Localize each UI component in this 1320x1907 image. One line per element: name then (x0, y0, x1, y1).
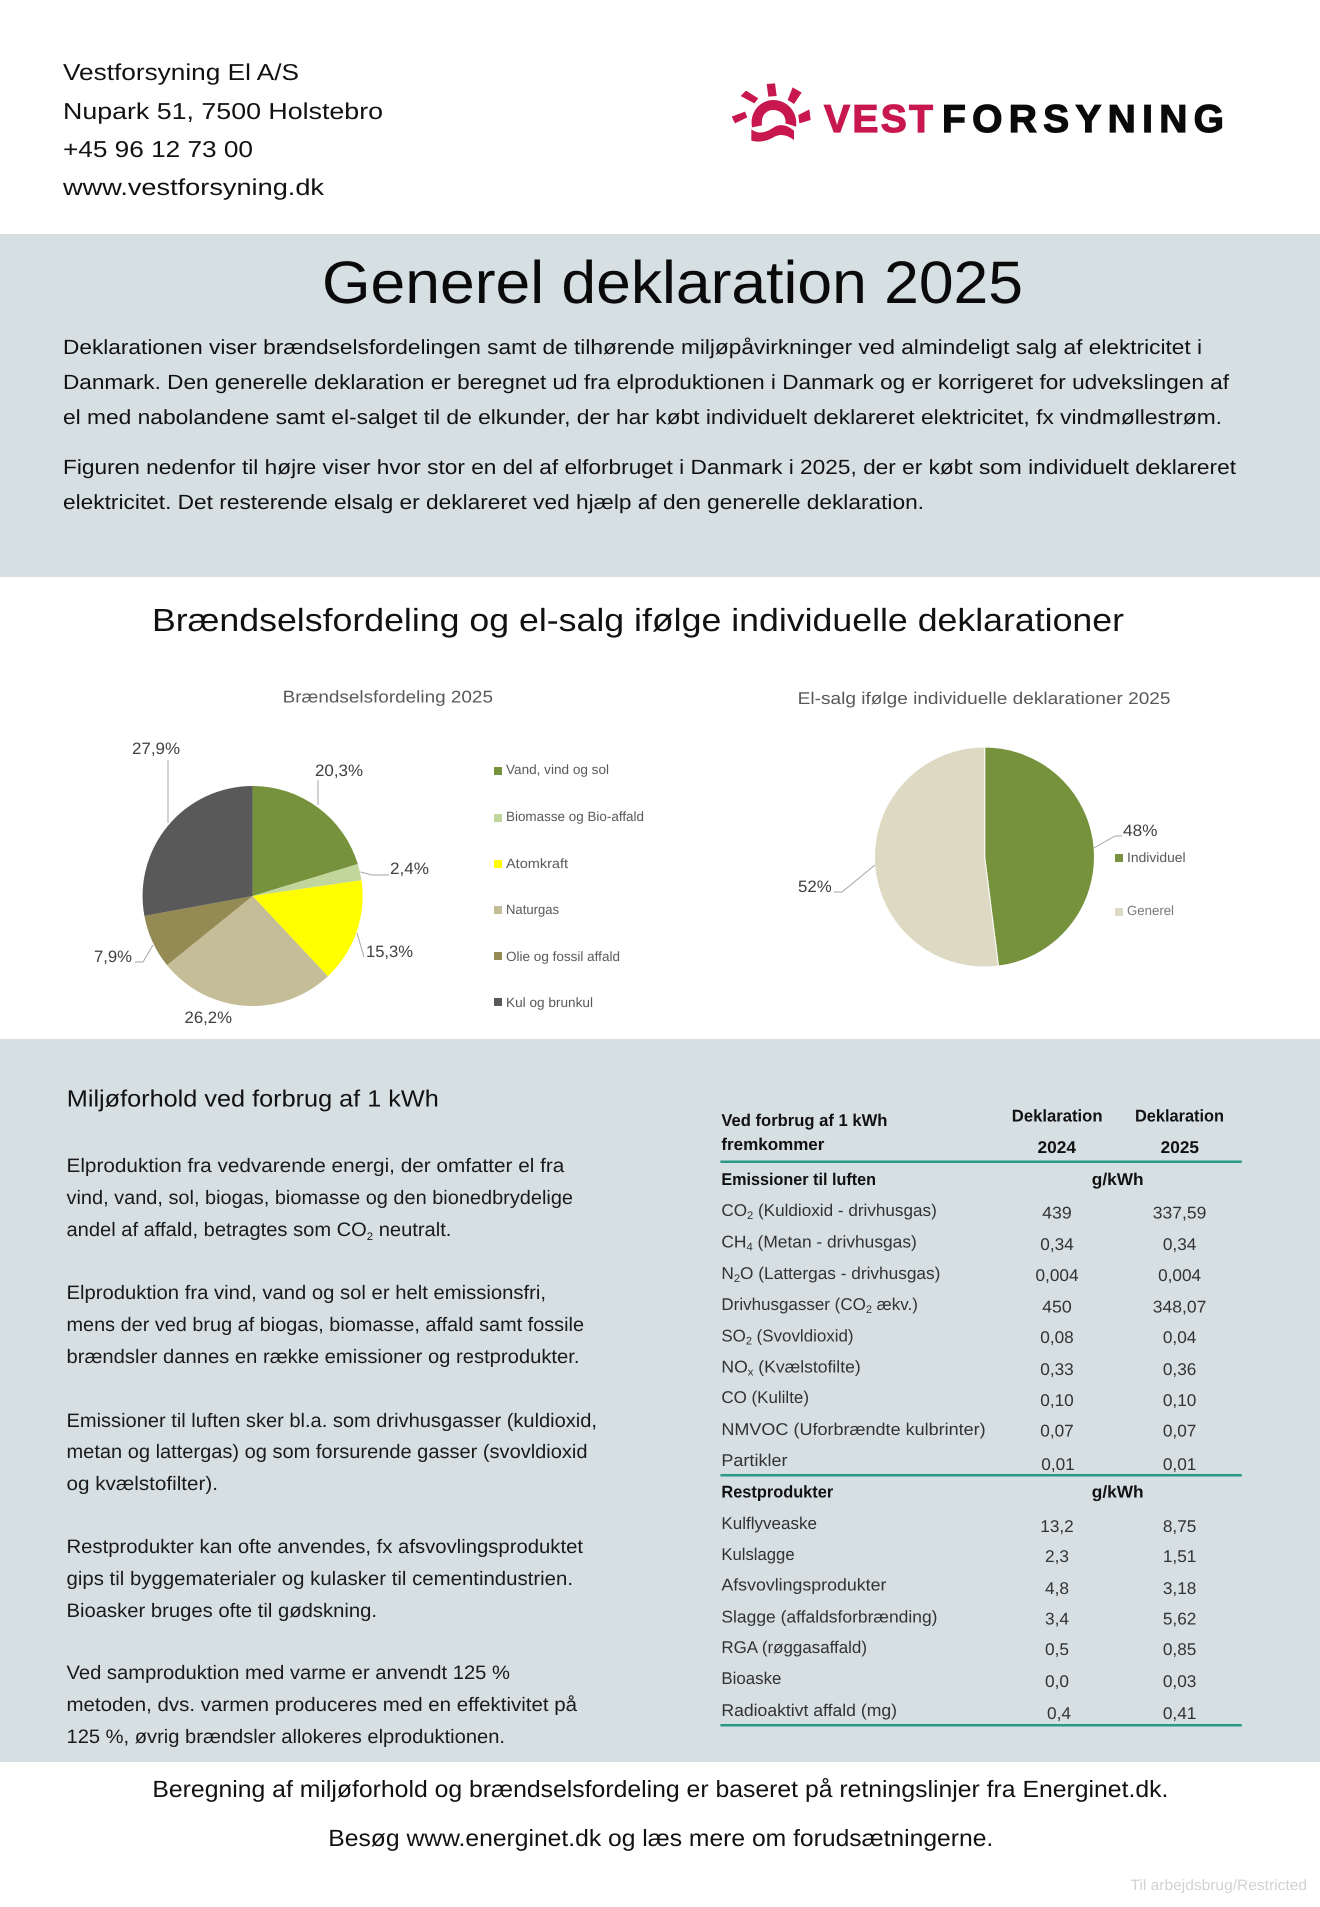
data labels and leader lines: 27,9% (132, 740, 180, 758)
legend: Generel (1127, 903, 1174, 918)
section: Emissioner til luften: 0,36 (1163, 1360, 1196, 1379)
legend: Naturgas (506, 902, 559, 917)
text: environment paragraphs: Ved samproduktion med varme er anvendt 125 % (66, 1662, 510, 1684)
section: Restprodukter: 13,2 (1040, 1517, 1074, 1536)
panel: environment band (0, 1039, 1320, 1762)
table header (721, 1107, 1224, 1157)
table header: fremkommer (721, 1135, 825, 1154)
section: Emissioner til luften: NMVOC (Uforbrændte kulbrinter) (721, 1420, 986, 1439)
section: Emissioner til luften: 0,01 (1041, 1455, 1075, 1474)
contact block (62, 59, 383, 200)
section: Emissioner til luften: 2 (866, 1304, 872, 1316)
legend: Biomasse og Bio-affald (506, 809, 644, 824)
section: Restprodukter (721, 1483, 1196, 1723)
section: Emissioner til luften: CO (721, 1201, 747, 1220)
section: Restprodukter: 0,4 (1047, 1704, 1071, 1723)
legend (494, 762, 644, 1010)
data labels and leader lines: 26,2% (184, 1009, 232, 1027)
text: environment paragraphs: gips til byggematerialer og kulasker til cementindustrien. (66, 1568, 573, 1590)
heading: Miljøforhold: Miljøforhold ved forbrug af 1 kWh (67, 1086, 439, 1112)
footer note: Besøg www.energinet.dk og læs mere om forudsætningerne. (328, 1825, 993, 1851)
section: Emissioner til luften: 0,10 (1040, 1391, 1074, 1410)
data labels and leader lines (798, 822, 1158, 896)
data labels and leader lines: 2,4% (390, 860, 429, 878)
chart title: El-salg ifølge individuelle deklarationer 2025 (798, 689, 1170, 708)
classification watermark: Til arbejdsbrug/Restricted (1130, 1877, 1307, 1894)
intro text: Figuren nedenfor til højre viser hvor stor en del af elforbruget i Danmark i 2025, der er købt som individuelt deklareret (63, 456, 1236, 479)
section: Restprodukter: 0,5 (1045, 1640, 1069, 1659)
intro text: Deklarationen viser brændselsfordelingen samt de tilhørende miljøpåvirkninger ved almindeligt salg af elektricitet i (63, 336, 1202, 359)
data labels and leader lines (94, 740, 429, 1027)
section: Restprodukter: Afsvovlingsprodukter (721, 1576, 887, 1595)
table header: 2025 (1161, 1138, 1199, 1157)
logo wordmark: VEST (824, 98, 933, 141)
legend: Kul og brunkul (506, 995, 593, 1010)
text: environment paragraphs: brændsler dannes en række emissioner og restprodukter. (66, 1346, 580, 1368)
section: Emissioner til luften: 0,07 (1163, 1422, 1196, 1441)
section: Restprodukter: Slagge (affaldsforbrænding) (721, 1608, 938, 1627)
text: environment paragraphs: neutralt. (373, 1219, 451, 1241)
logo: Vestforsyning (732, 83, 1224, 142)
section: Restprodukter: Restprodukter (721, 1483, 834, 1502)
section: Emissioner til luften: 2 (747, 1210, 753, 1222)
table header: Deklaration (1012, 1107, 1102, 1126)
footer note: Beregning af miljøforhold og brændselsfordeling er baseret på retningslinjer fra Energinet.dk. (152, 1776, 1168, 1802)
section: Emissioner til luften: Drivhusgasser (CO (721, 1295, 866, 1314)
text: environment paragraphs: vind, vand, sol, biogas, biomasse og den bionedbrydelige (66, 1187, 573, 1209)
section: Restprodukter: g/kWh (1092, 1483, 1144, 1502)
legend: Atomkraft (506, 856, 568, 871)
section: Restprodukter: RGA (røggasaffald) (721, 1638, 867, 1657)
section: Emissioner til luften: 0,07 (1040, 1422, 1074, 1441)
section heading: Brændselsfordeling og el-salg ifølge individuelle deklarationer (152, 602, 1124, 638)
data labels and leader lines: 52% (798, 878, 832, 896)
section: Restprodukter: 3,18 (1163, 1579, 1196, 1598)
pie slices (143, 786, 363, 1006)
table header: Deklaration (1135, 1107, 1224, 1126)
data labels and leader lines: 7,9% (94, 948, 132, 966)
text: environment paragraphs: 2 (367, 1231, 373, 1243)
section: Emissioner til luften: g/kWh (1092, 1170, 1144, 1189)
contact block: Vestforsyning El A/S (63, 59, 299, 85)
contact block: Nupark 51, 7500 Holstebro (63, 98, 383, 124)
section: Restprodukter: Bioaske (721, 1669, 781, 1688)
section: Emissioner til luften: N (721, 1264, 734, 1283)
section: Emissioner til luften: 0,01 (1163, 1455, 1196, 1474)
section: Restprodukter: Radioaktivt affald (mg) (721, 1701, 897, 1720)
section: Restprodukter: 0,85 (1163, 1640, 1196, 1659)
section: Emissioner til luften: 4 (746, 1242, 753, 1254)
intro text (63, 336, 1236, 514)
icon: sun and wave (732, 83, 811, 142)
section: Emissioner til luften: 337,59 (1153, 1203, 1206, 1222)
pie slices (874, 747, 1094, 967)
table: emissions and residual products (720, 1107, 1242, 1726)
text: environment paragraphs: metoden, dvs. varmen produceres med en effektivitet på (66, 1694, 577, 1716)
intro text: elektricitet. Det resterende elsalg er deklareret ved hjælp af den generelle deklaration. (63, 491, 924, 514)
section: Emissioner til luften: 0,04 (1163, 1328, 1196, 1347)
text: environment paragraphs: metan og lattergas) og som forsurende gasser (svovldioxid (66, 1441, 588, 1463)
data labels and leader lines: 15,3% (366, 943, 413, 961)
section: Emissioner til luften: 0,004 (1036, 1266, 1078, 1285)
section: Emissioner til luften: NO (721, 1358, 747, 1377)
section: Emissioner til luften: CH (721, 1233, 746, 1252)
section: Restprodukter: 0,41 (1163, 1704, 1196, 1723)
text: environment paragraphs: Elproduktion fra vind, vand og sol er helt emissionsfri, (66, 1282, 546, 1304)
section: Restprodukter: 1,51 (1163, 1547, 1196, 1566)
table header: Ved forbrug af 1 kWh (721, 1111, 887, 1130)
section: Emissioner til luften: 2 (746, 1336, 752, 1348)
logo wordmark: FORSYNING (942, 98, 1224, 141)
section: Emissioner til luften: 0,34 (1163, 1235, 1196, 1254)
section: Emissioner til luften: CO (Kulilte) (721, 1388, 809, 1407)
section: Emissioner til luften (721, 1170, 1206, 1474)
section: Emissioner til luften: 450 (1042, 1298, 1072, 1317)
legend: Olie og fossil affald (506, 949, 620, 964)
text: environment paragraphs (66, 1155, 597, 1748)
chart title: Brændselsfordeling 2025 (283, 688, 493, 706)
panel: intro band (0, 234, 1320, 577)
legend: Individuel (1127, 850, 1186, 865)
section: Emissioner til luften: (Kuldioxid - drivhusgas) (753, 1201, 937, 1220)
section: Emissioner til luften: 348,07 (1153, 1298, 1206, 1317)
section: Restprodukter: 2,3 (1045, 1547, 1069, 1566)
section: Emissioner til luften: O (Lattergas - drivhusgas) (740, 1264, 940, 1283)
data labels and leader lines: 48% (1123, 822, 1158, 840)
section: Emissioner til luften: (Metan - drivhusgas) (753, 1233, 917, 1252)
section: Restprodukter: 4,8 (1045, 1579, 1069, 1598)
chart: Brændselsfordeling pie (94, 688, 644, 1027)
section: Emissioner til luften: 439 (1042, 1203, 1072, 1222)
data labels and leader lines: 20,3% (315, 762, 363, 780)
section: Emissioner til luften: ækv.) (872, 1295, 918, 1314)
section: Emissioner til luften: Partikler (721, 1451, 788, 1470)
title: Generel deklaration 2025 (322, 249, 1023, 316)
table header: 2024 (1038, 1138, 1077, 1157)
contact block: www.vestforsyning.dk (62, 174, 325, 200)
text: environment paragraphs: Bioasker bruges ofte til gødskning. (66, 1600, 377, 1622)
section: Restprodukter: 5,62 (1163, 1610, 1196, 1629)
section: Emissioner til luften: 0,34 (1040, 1235, 1074, 1254)
legend: Vand, vind og sol (506, 762, 609, 777)
section: Restprodukter: 0,0 (1045, 1672, 1069, 1691)
legend (1115, 850, 1186, 918)
section: Restprodukter: Kulslagge (721, 1545, 795, 1564)
section: Restprodukter: 8,75 (1163, 1517, 1196, 1536)
text: environment paragraphs: Elproduktion fra vedvarende energi, der omfatter el fra (66, 1155, 564, 1177)
text: environment paragraphs: Emissioner til luften sker bl.a. som drivhusgasser (kuldioxid, (66, 1410, 597, 1432)
text: environment paragraphs: og kvælstofilter). (66, 1473, 218, 1495)
text: environment paragraphs: mens der ved brug af biogas, biomasse, affald samt fossile (66, 1314, 584, 1336)
contact block: +45 96 12 73 00 (63, 136, 253, 162)
section: Emissioner til luften: 0,33 (1040, 1360, 1074, 1379)
section: Emissioner til luften: 2 (734, 1273, 740, 1285)
section: Emissioner til luften: SO (721, 1327, 746, 1346)
chart: El-salg pie (798, 689, 1186, 967)
intro text: Danmark. Den generelle deklaration er beregnet ud fra elproduktionen i Danmark og er korrigeret for udvekslingen af (63, 371, 1229, 394)
section: Emissioner til luften: x (748, 1367, 754, 1379)
intro text: el med nabolandene samt el-salget til de elkunder, der har købt individuelt deklareret elektricitet, fx vindmøllestrøm. (63, 406, 1222, 429)
section: Emissioner til luften: Emissioner til luften (721, 1170, 876, 1189)
section: Emissioner til luften: 0,004 (1158, 1266, 1201, 1285)
section: Restprodukter: 0,03 (1163, 1672, 1196, 1691)
section: Emissioner til luften: 0,10 (1163, 1391, 1196, 1410)
text: environment paragraphs: andel af affald, betragtes som CO (66, 1219, 358, 1241)
section: Emissioner til luften: 0,08 (1040, 1328, 1074, 1347)
text: environment paragraphs: Restprodukter kan ofte anvendes, fx afsvovlingsproduktet (66, 1536, 584, 1558)
section: Restprodukter: Kulflyveaske (721, 1514, 817, 1533)
footer note (152, 1776, 1168, 1851)
text: environment paragraphs: 125 %, øvrig brændsler allokeres elproduktionen. (66, 1726, 505, 1748)
section: Restprodukter: 3,4 (1045, 1610, 1069, 1629)
section: Emissioner til luften: (Svovldioxid) (752, 1327, 854, 1346)
section: Emissioner til luften: (Kvælstofilte) (753, 1358, 861, 1377)
